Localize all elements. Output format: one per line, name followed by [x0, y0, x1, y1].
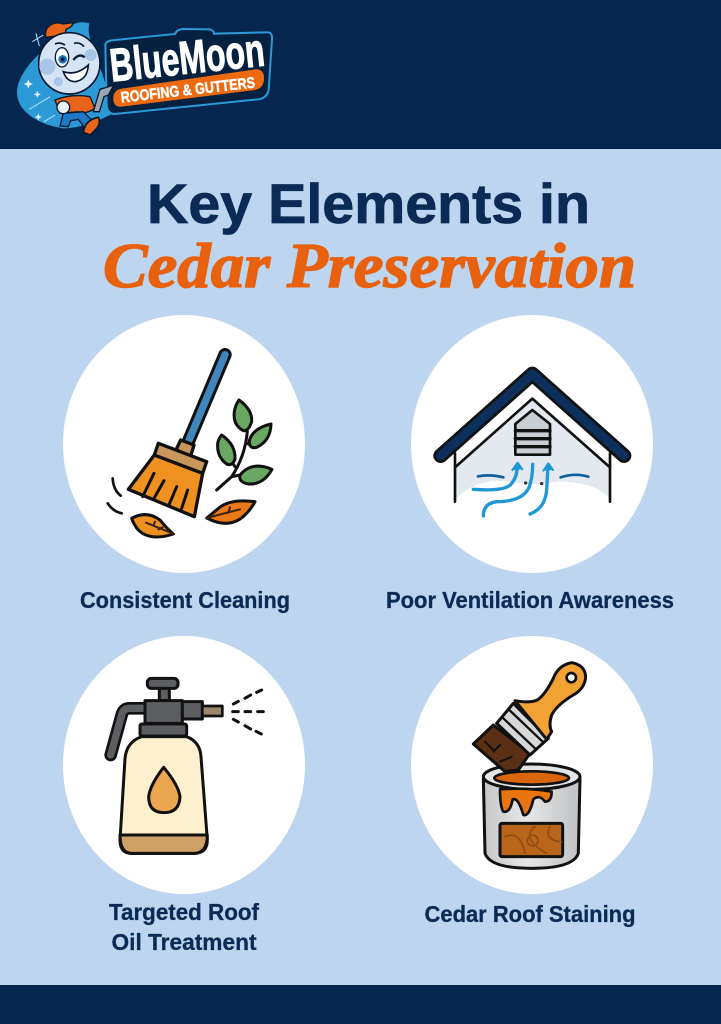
panel: targeted roof oil treatment: [63, 636, 305, 955]
icon: broom and leaves: [108, 355, 272, 537]
label: Targeted Roof: [109, 899, 259, 925]
title: [103, 172, 636, 301]
panel: poor ventilation awareness: [386, 315, 674, 613]
circle: [411, 636, 653, 894]
logo mascot: [39, 23, 114, 135]
icon: brush and stain can: [473, 663, 586, 868]
panel: consistent cleaning: [63, 315, 305, 613]
footer band: [0, 985, 721, 1024]
label: Oil Treatment: [112, 929, 257, 955]
circle: [63, 636, 305, 894]
label: Cedar Roof Staining: [424, 901, 636, 927]
logo badge: BlueMoon: [107, 24, 267, 92]
logo badge: ROOFING & GUTTERS: [120, 74, 256, 107]
label: Consistent Cleaning: [80, 587, 290, 613]
label: [109, 899, 259, 955]
icon: attic ventilation: [441, 374, 624, 516]
header band: [0, 0, 721, 149]
label: Poor Ventilation Awareness: [386, 587, 674, 613]
circle: [63, 315, 305, 573]
logo badge: [105, 24, 272, 114]
title line 1: Key Elements in: [147, 172, 590, 235]
logo: BlueMoon Roofing & Gutters: [17, 22, 272, 135]
icon: oil spray bottle: [111, 678, 263, 853]
circle: [411, 315, 653, 573]
panel: cedar roof staining: [411, 636, 653, 927]
logo swoosh: [17, 22, 115, 128]
title line 2: Cedar Preservation: [103, 230, 636, 301]
